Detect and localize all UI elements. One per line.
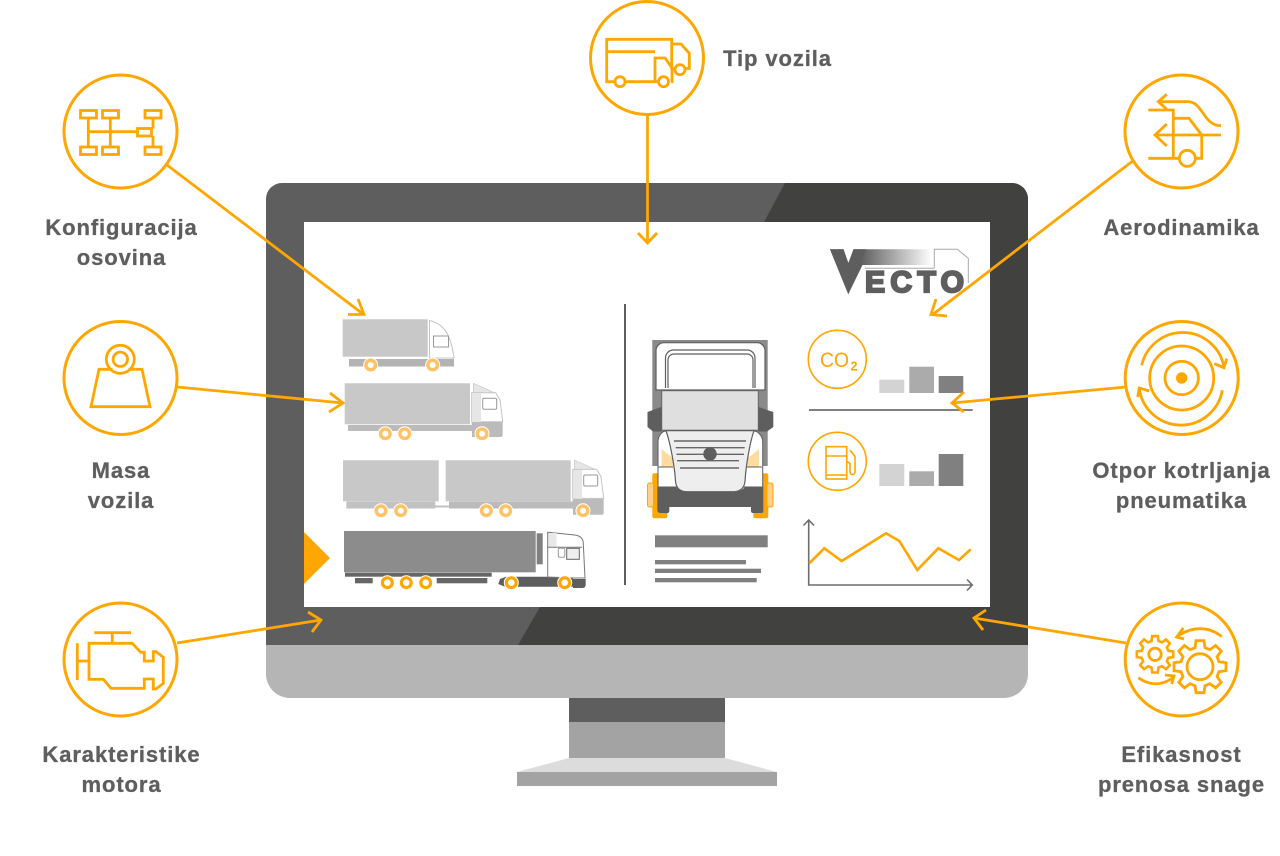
monitor chin [266, 645, 1028, 698]
bar chart: CO2 [879, 367, 963, 393]
monitor frame [266, 183, 1028, 645]
icon: axle configuration [64, 75, 177, 188]
truck 2: rigid three-axle [345, 383, 503, 441]
icon: rolling resistance [1125, 322, 1238, 434]
monitor screen [304, 222, 990, 607]
icon: aerodynamics [1125, 75, 1238, 188]
truck 3: road train with trailer [343, 460, 604, 518]
arrow: engine characteristics [177, 612, 321, 643]
monitor frame dark reflection [518, 183, 1028, 645]
line chart [804, 520, 972, 590]
arrow: vehicle type [638, 115, 657, 243]
label: vehicle type: Tip vozila [723, 46, 832, 71]
label: engine characteristics: motora [82, 772, 161, 797]
VECTO logo [830, 249, 968, 299]
icon: CO2 emissions: CO [820, 348, 849, 372]
label: transmission efficiency: prenosa snage [1098, 772, 1265, 797]
arrow: transmission efficiency [974, 610, 1126, 643]
selection marker triangle [304, 532, 330, 584]
monitor stand [517, 758, 777, 786]
label: transmission efficiency: Efikasnost [1121, 742, 1242, 767]
icon: vehicle mass [64, 322, 177, 434]
icon: CO2 emissions: 2 [850, 360, 858, 374]
screen divider [624, 304, 626, 585]
panel divider line [809, 409, 973, 411]
icon: fuel pump [808, 432, 866, 490]
arrow: aerodynamics [931, 160, 1134, 316]
VECTO logo: ECTO [865, 266, 964, 299]
monitor [266, 183, 1028, 786]
label: rolling resistance: Otpor kotrljanja [1092, 458, 1271, 483]
label: engine characteristics: Karakteristike [42, 742, 201, 767]
label: vehicle mass: Masa [92, 458, 150, 483]
arrow: axle configuration [167, 165, 364, 314]
truck front view [648, 340, 773, 518]
text lines under truck [655, 535, 768, 582]
arrow: rolling resistance [952, 387, 1126, 412]
bar chart: fuel [879, 454, 963, 486]
label: vehicle mass: vozila [88, 488, 154, 513]
icon: CO2 emissions [808, 330, 866, 388]
label: axle configuration: Konfiguracija [45, 215, 198, 240]
truck 4: tractor with semitrailer, selected [344, 531, 586, 590]
icon: vehicle type [590, 2, 704, 114]
arrow: vehicle mass [177, 387, 343, 412]
icon: engine [64, 603, 177, 716]
monitor neck [569, 698, 725, 758]
truck 1: rigid two-axle [343, 319, 454, 372]
label: aerodynamics: Aerodinamika [1103, 215, 1260, 240]
icon: transmission gears [1125, 603, 1238, 716]
label: axle configuration: osovina [77, 245, 166, 270]
label: rolling resistance: pneumatika [1116, 488, 1247, 513]
